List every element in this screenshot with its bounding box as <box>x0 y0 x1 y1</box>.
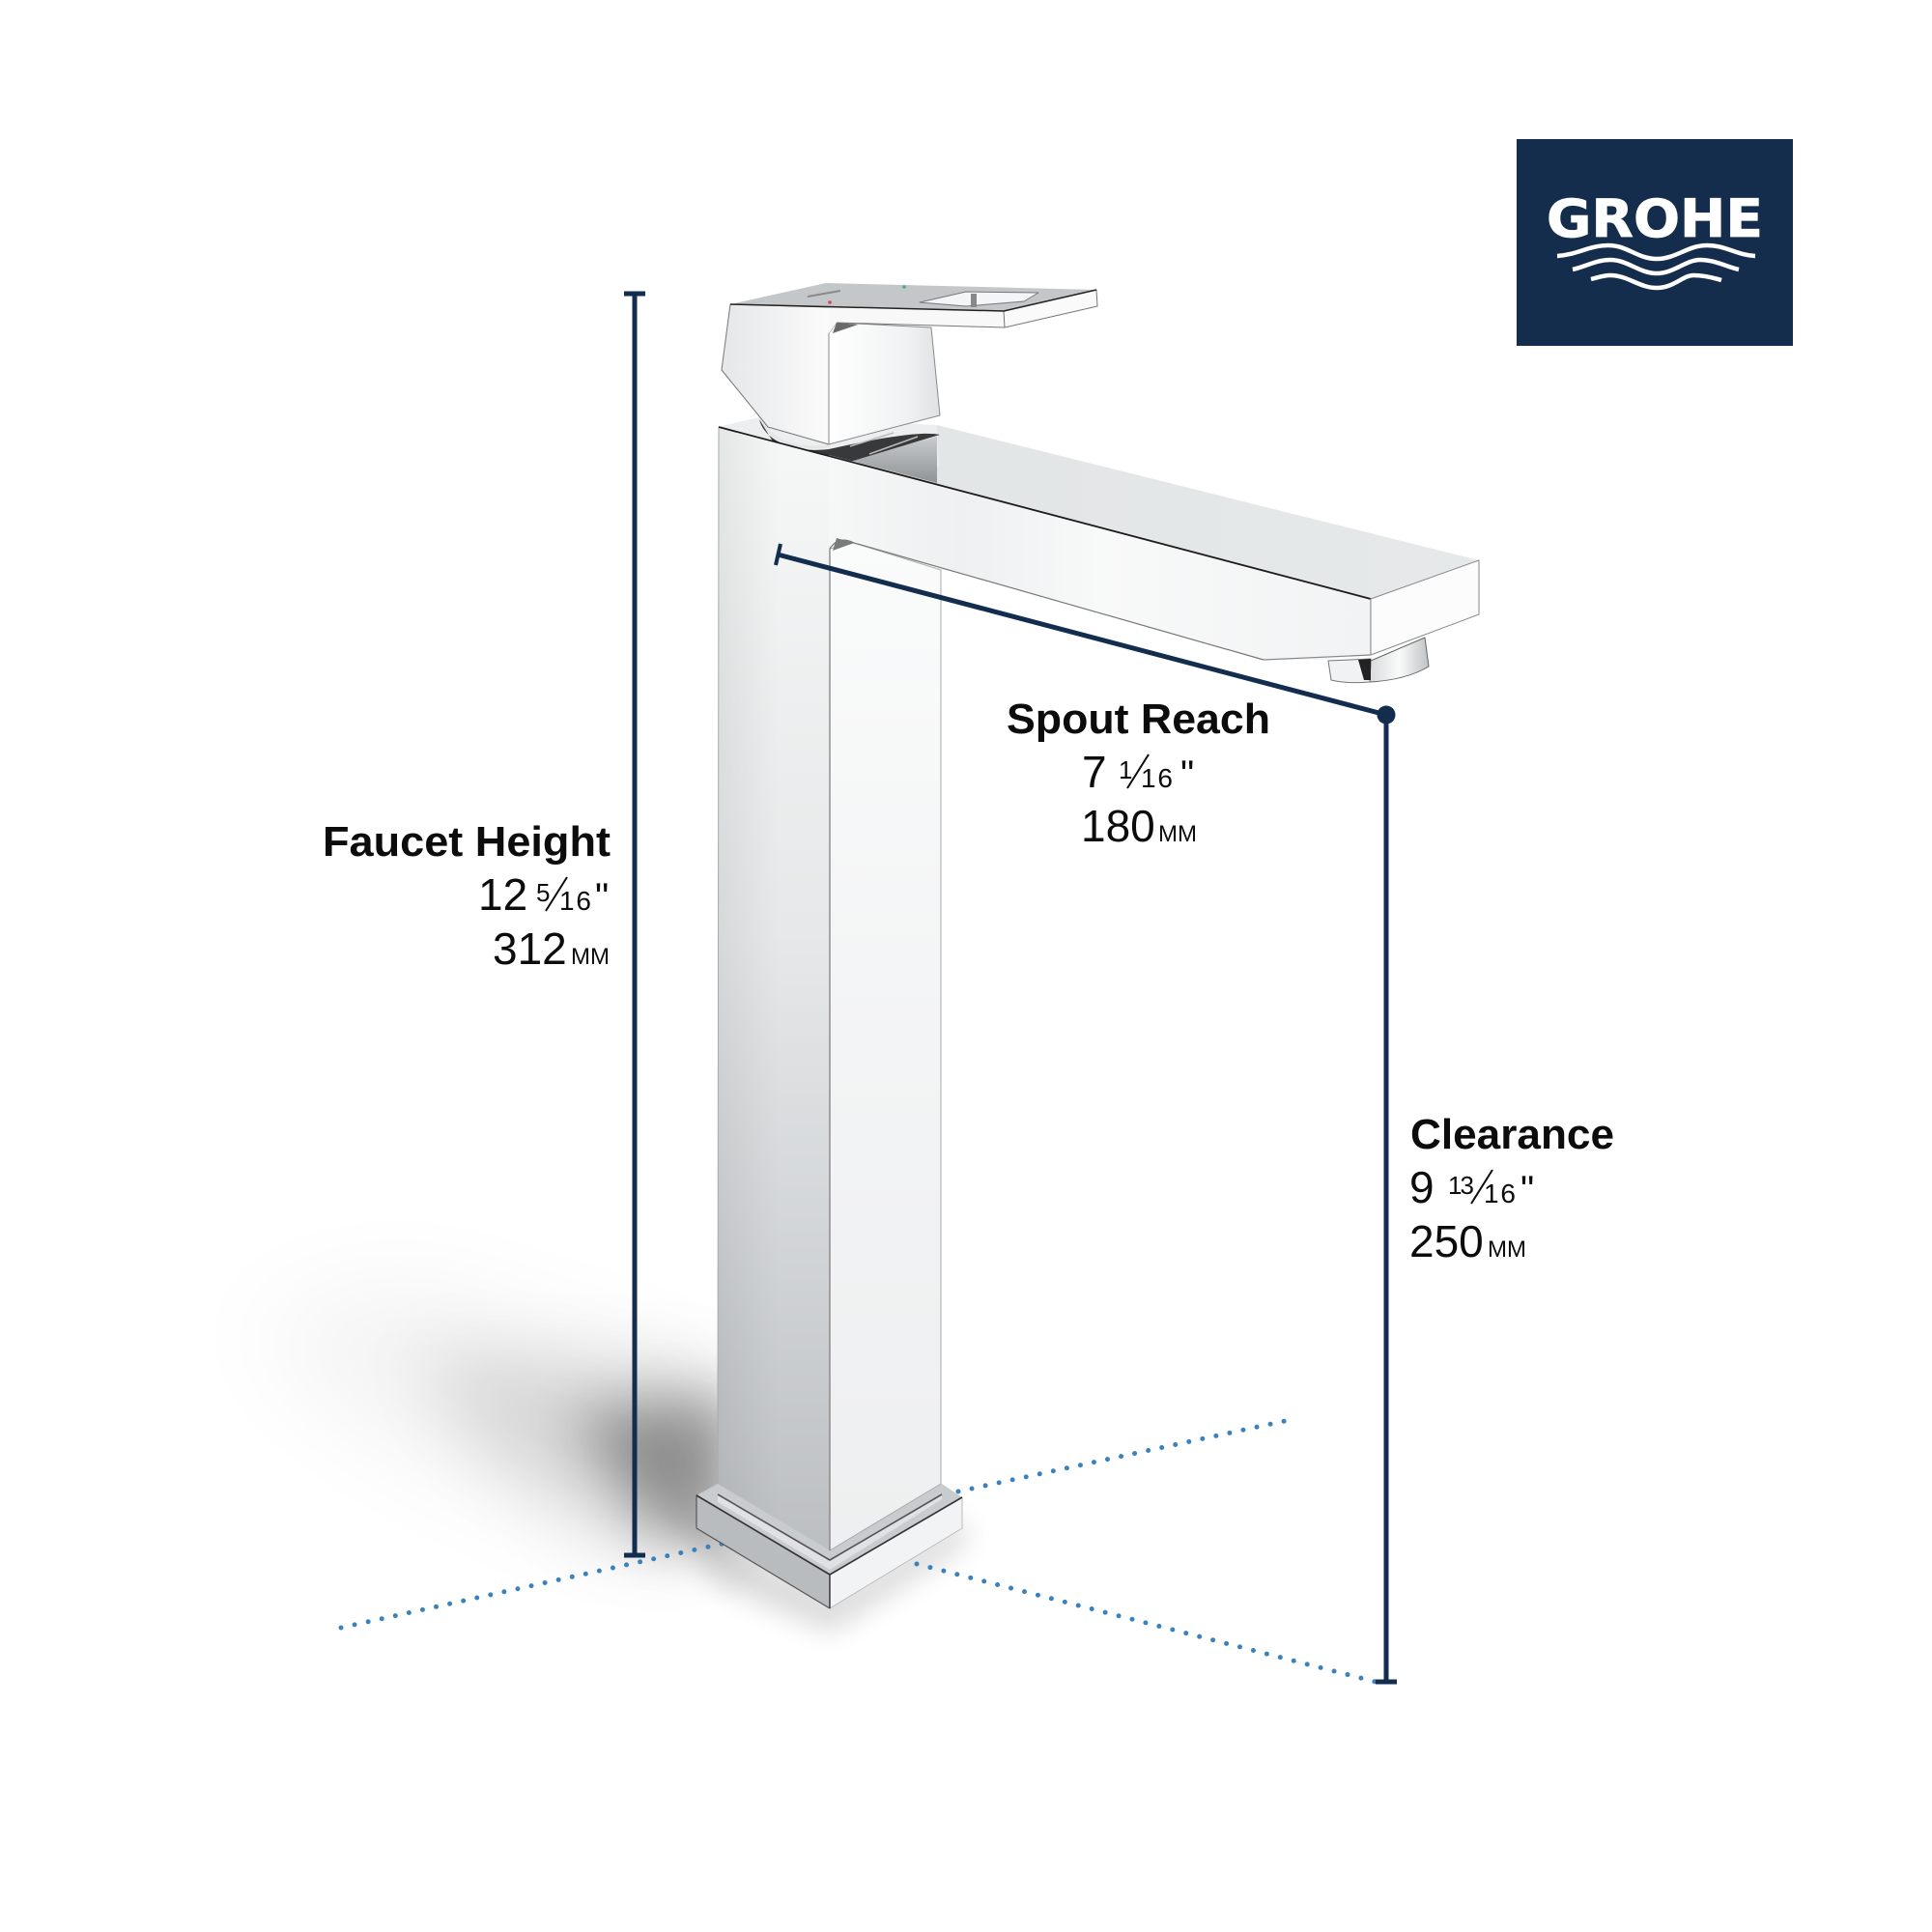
label: clearance: 16 <box>1484 1179 1516 1208</box>
label: clearance: 250 <box>1409 1216 1484 1266</box>
faucet column left face <box>718 427 830 1550</box>
spout top face <box>719 417 1479 599</box>
label: spout reach: 7 <box>1082 747 1107 797</box>
label: clearance <box>1409 1111 1614 1266</box>
faucet cast shadow <box>242 1285 966 1633</box>
dimension line: spout reach <box>776 544 1395 724</box>
dimension line: faucet height <box>624 294 645 1555</box>
label: faucet height: Faucet Height <box>323 818 611 866</box>
handle right face <box>829 323 940 444</box>
faucet illustration <box>696 283 1479 1608</box>
handle left face <box>722 304 830 444</box>
logo waves <box>1557 245 1755 288</box>
label: faucet height: 16 <box>559 886 591 916</box>
label: faucet height: MM <box>571 944 610 970</box>
label: faucet height: 12 <box>478 869 527 920</box>
dimension line: clearance <box>1376 715 1397 1682</box>
label: faucet height: 5 <box>536 878 550 907</box>
label: spout reach: MM <box>1158 821 1197 847</box>
label: clearance: 13 <box>1448 1171 1474 1200</box>
label: spout reach <box>1007 696 1270 851</box>
handle well <box>719 417 940 483</box>
label: spout reach: 1 <box>1119 755 1132 784</box>
label: spout reach: " <box>1180 753 1194 796</box>
handle shadow notches <box>833 323 858 333</box>
aerator <box>1328 638 1429 683</box>
label: clearance: 9 <box>1409 1162 1435 1212</box>
floor dotted lines <box>341 1421 1376 1682</box>
handle plate opening <box>920 292 1038 307</box>
label: faucet height <box>323 818 611 974</box>
label: clearance: " <box>1520 1169 1534 1211</box>
label: spout reach: Spout Reach <box>1007 696 1270 743</box>
logo: GROHE: GROHE <box>1547 188 1763 249</box>
faucet base plate <box>696 1484 962 1608</box>
logo: GROHE <box>1517 139 1793 346</box>
label: clearance: Clearance <box>1410 1111 1614 1158</box>
handle front strip <box>829 307 1005 333</box>
handle plate front <box>1004 290 1097 327</box>
handle plate top <box>730 283 1096 311</box>
label: faucet height: 312 <box>493 923 567 974</box>
spout front face <box>829 455 1371 660</box>
label: spout reach: 180 <box>1081 801 1155 851</box>
faucet column right face <box>830 543 941 1550</box>
handle indicators <box>808 285 906 304</box>
label: spout reach: 16 <box>1141 763 1173 793</box>
label: faucet height: " <box>595 876 609 919</box>
label: clearance: MM <box>1488 1236 1526 1263</box>
spout end face <box>1371 560 1479 655</box>
